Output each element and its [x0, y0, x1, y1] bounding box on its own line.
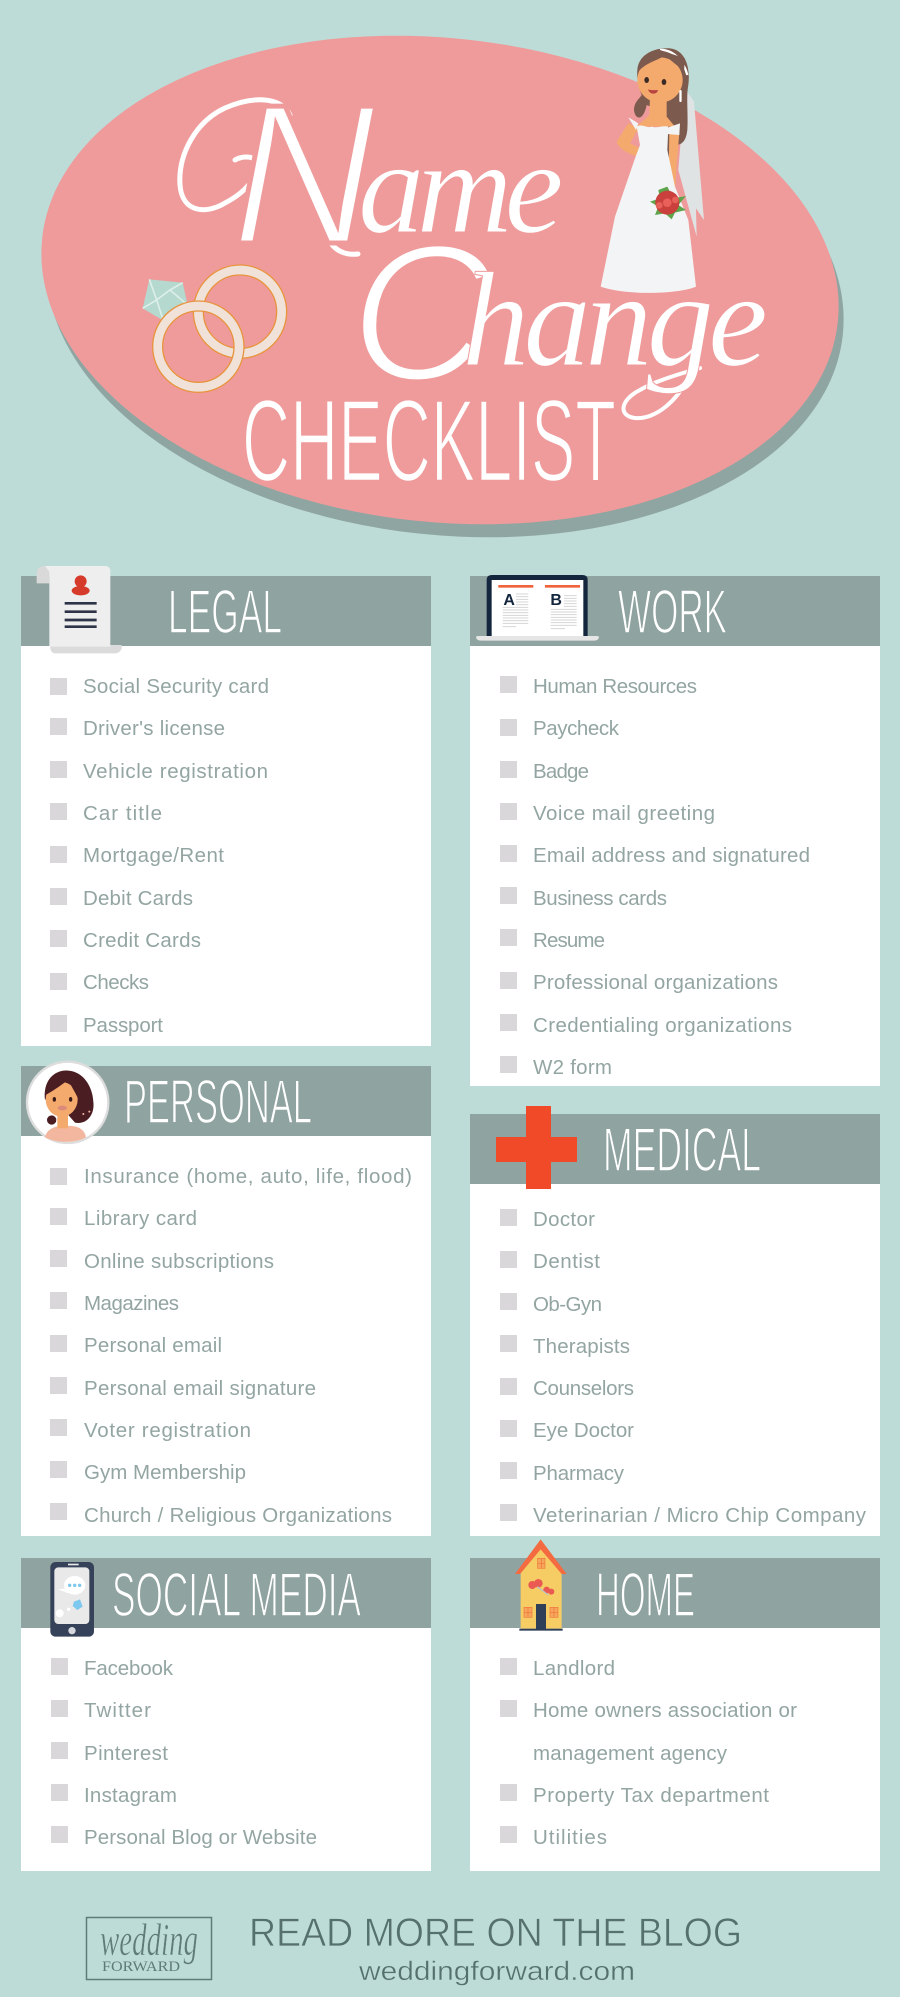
social media header bar — [21, 1558, 431, 1628]
checklist: work items: W2 form — [533, 1056, 612, 1079]
personal header bar — [21, 1066, 431, 1136]
checklist: legal items: Vehicle registration — [83, 760, 268, 783]
footer heading: read more: READ MORE ON THE BLOG — [249, 1911, 742, 1955]
checklist: legal items: Car title — [83, 802, 162, 825]
dress — [601, 126, 696, 293]
checklist: medical items: Counselors — [533, 1377, 634, 1400]
icon: legal document — [37, 566, 122, 653]
panel: home — [470, 1539, 880, 1871]
checklist: work items: Professional organizations — [533, 971, 778, 994]
checklist: legal items: Driver's license — [83, 717, 225, 740]
checklist: social media items — [51, 1657, 317, 1849]
checklist: legal items: Credit Cards — [83, 929, 201, 952]
front ring — [158, 306, 239, 387]
checklist: work items: Human Resources — [533, 675, 697, 698]
checklist: personal items: Insurance (home, auto, life, flood) — [84, 1165, 412, 1188]
icon: laptop: B — [550, 592, 562, 609]
title: Change — [350, 204, 765, 422]
footer website address: weddingforward.com — [358, 1956, 635, 1986]
heading: Social Media: SOCIAL MEDIA — [112, 1561, 361, 1630]
panel: personal — [21, 1062, 431, 1536]
hair — [634, 48, 689, 158]
title: Name: ame — [358, 113, 562, 261]
legal card — [21, 576, 431, 1046]
checklist: work items: Credentialing organizations — [533, 1014, 792, 1037]
social media card — [21, 1558, 431, 1871]
headband — [660, 50, 687, 75]
heading: Home: HOME — [596, 1561, 695, 1630]
checklist: legal items: Debit Cards — [83, 887, 193, 910]
checklist: legal items: Mortgage/Rent — [83, 844, 224, 867]
hero: pink oval title badge — [17, 0, 868, 575]
bouquet — [650, 187, 686, 219]
checklist: home items: Property Tax department — [533, 1784, 769, 1807]
heading: Work: WORK — [618, 578, 727, 647]
checklist: medical items: Dentist — [533, 1250, 600, 1273]
checklist: legal items — [50, 675, 269, 1037]
panel: work — [470, 575, 880, 1086]
title: Change: hange — [462, 246, 765, 395]
checklist: medical items: Therapists — [533, 1335, 630, 1358]
checklist: home items: Landlord — [533, 1657, 615, 1680]
footer logo: Wedding Forward: FORWARD — [102, 1959, 180, 1975]
checklist: medical items: Veterinarian / Micro Chip Company — [533, 1504, 867, 1527]
heading: Personal: PERSONAL — [124, 1068, 312, 1137]
icon: smartphone — [50, 1562, 94, 1637]
pink oval — [17, 0, 863, 562]
checklist: home items: Utilities — [533, 1826, 607, 1849]
checklist: home items: Home owners association or — [533, 1699, 797, 1722]
work header bar — [470, 576, 880, 646]
icon: woman portrait — [27, 1062, 108, 1143]
checklist: medical items: Doctor — [533, 1208, 595, 1231]
checklist: social media items: Facebook — [84, 1657, 174, 1680]
checklist: work items — [500, 675, 810, 1079]
checklist: work items: Paycheck — [533, 717, 620, 740]
checklist: social media items: Instagram — [84, 1784, 177, 1807]
home header bar — [470, 1558, 880, 1628]
checklist: personal items: Gym Membership — [84, 1461, 246, 1484]
oval shadow — [22, 11, 868, 575]
checklist: personal items: Library card — [84, 1207, 197, 1230]
icon: laptop — [476, 575, 599, 641]
face and neck — [637, 97, 675, 127]
back ring — [198, 270, 282, 353]
checklist: social media items: Pinterest — [84, 1742, 168, 1765]
checklist: personal items: Personal email — [84, 1334, 222, 1357]
checklist: work items: Badge — [533, 760, 589, 783]
checklist: personal items — [50, 1165, 412, 1527]
left arm — [617, 123, 644, 157]
home card — [470, 1558, 880, 1871]
title: Name — [180, 64, 562, 286]
panel: medical — [470, 1106, 880, 1536]
work card — [470, 576, 880, 1086]
icon: wedding rings — [143, 270, 282, 387]
checklist: personal items: Voter registration — [84, 1419, 251, 1442]
checklist: legal items: Passport — [83, 1014, 163, 1037]
icon: bride — [601, 48, 704, 293]
legal header bar — [21, 576, 431, 646]
checklist: medical items: Pharmacy — [533, 1462, 625, 1485]
checklist: medical items — [500, 1208, 867, 1527]
checklist: work items: Resume — [533, 929, 605, 952]
personal card — [21, 1066, 431, 1536]
icon: medical cross — [496, 1106, 577, 1189]
checklist: personal items: Church / Religious Organizations — [84, 1504, 392, 1527]
checklist: legal items: Social Security card — [83, 675, 269, 698]
checklist: social media items: Personal Blog or Website — [84, 1826, 317, 1849]
checklist: medical items: Ob-Gyn — [533, 1293, 602, 1316]
diamond — [143, 279, 188, 321]
title: Checklist: CHECKLIST — [242, 375, 616, 506]
panel: legal — [21, 566, 431, 1046]
veil — [678, 88, 704, 237]
footer logo: Wedding Forward — [86, 1914, 212, 1980]
footer logo: Wedding Forward: wedding — [100, 1914, 198, 1965]
title: Name: N — [232, 64, 376, 286]
right arm — [668, 133, 679, 193]
panel: social media — [21, 1558, 431, 1871]
checklist: work items: Email address and signatured — [533, 844, 810, 867]
heading: Legal: LEGAL — [168, 578, 282, 647]
checklist: personal items: Online subscriptions — [84, 1250, 274, 1273]
heading: Medical: MEDICAL — [603, 1116, 761, 1185]
icon: laptop: A — [503, 592, 515, 609]
checklist: home items: management agency — [533, 1742, 728, 1765]
medical header bar — [470, 1114, 880, 1184]
title: Change: C — [350, 204, 492, 422]
icon: house — [515, 1539, 567, 1631]
checklist: medical items: Eye Doctor — [533, 1419, 634, 1442]
checklist: work items: Voice mail greeting — [533, 802, 715, 825]
checklist: personal items: Magazines — [84, 1292, 179, 1315]
checklist: legal items: Checks — [83, 971, 149, 994]
checklist: work items: Business cards — [533, 887, 667, 910]
checklist: home items — [500, 1657, 797, 1849]
checklist: personal items: Personal email signature — [84, 1377, 316, 1400]
checklist: social media items: Twitter — [84, 1699, 151, 1722]
medical card — [470, 1114, 880, 1536]
